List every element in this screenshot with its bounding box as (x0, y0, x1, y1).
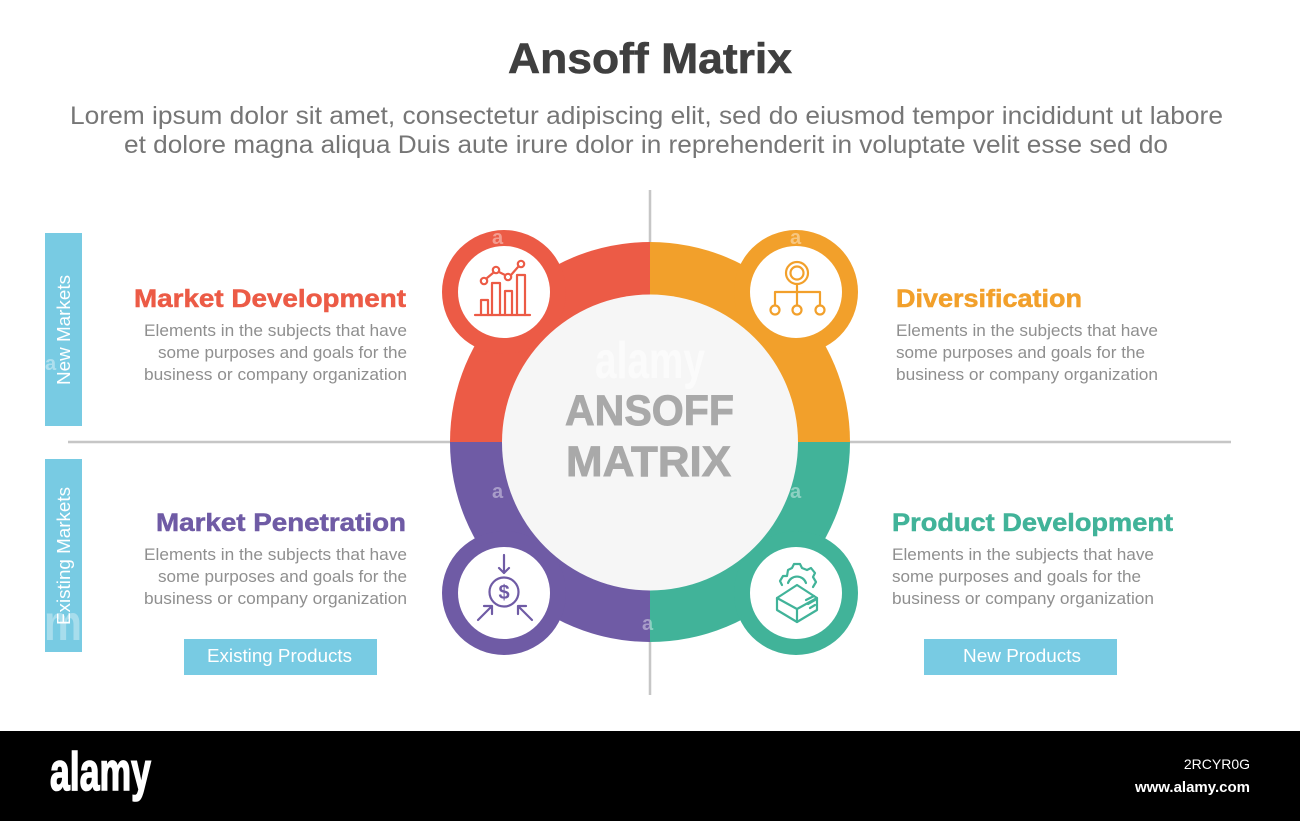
icon: dollar with inward arrows (458, 547, 550, 639)
axis label: Existing Markets (44, 459, 82, 652)
ring segment: green (650, 442, 858, 655)
watermark marks: a (492, 227, 504, 249)
footer band (0, 731, 1300, 821)
axis label: New Markets (45, 233, 82, 426)
text block: Market Penetration: Market Penetration (156, 509, 406, 537)
axis label: Existing Markets: m (44, 595, 82, 651)
axis label: Existing Products: Existing Products (207, 646, 352, 666)
central ring diagram (442, 230, 858, 655)
text block: Market Development: business or company organization (144, 365, 407, 384)
watermark marks: a (492, 481, 504, 503)
axis label: New Products: New Products (963, 646, 1081, 666)
center circle (502, 294, 798, 590)
ring segment: red (442, 230, 650, 442)
center circle: MATRIX (566, 438, 731, 486)
text block: Market Development: Elements in the subjects that have (144, 321, 407, 340)
text block: Product Development: Elements in the subjects that have (892, 545, 1154, 564)
center circle: alamy (595, 332, 705, 390)
icon: box with gear (750, 547, 842, 639)
text block: Diversification (896, 285, 1158, 384)
text block: Diversification: Diversification (896, 285, 1082, 313)
icon: dollar with inward arrows: $ (498, 582, 510, 604)
text block: Diversification: some purposes and goals for the (896, 343, 1145, 362)
watermark marks (45, 227, 802, 635)
center circle: ANSOFF (565, 387, 734, 435)
title: Ansoff Matrix (508, 35, 792, 83)
watermark marks: a (790, 481, 802, 503)
text block: Product Development: business or company organization (892, 589, 1154, 608)
subtitle: Lorem ipsum dolor sit amet, consectetur adipiscing elit, sed do eiusmod tempor incididunt ut labore (70, 102, 1223, 130)
text block: Market Development (134, 285, 407, 384)
text block: Market Penetration: some purposes and goals for the (158, 567, 407, 586)
text block: Market Development: some purposes and goals for the (158, 343, 407, 362)
text block: Market Penetration: Elements in the subjects that have (144, 545, 407, 564)
logo: alamy: alamy (50, 742, 151, 802)
watermark marks: a (642, 613, 654, 635)
watermark marks: a (790, 227, 802, 249)
text block: Market Penetration: business or company organization (144, 589, 407, 608)
text block: Market Development: Market Development (134, 285, 407, 313)
text block: Market Penetration (144, 509, 407, 608)
text block: Diversification: business or company organization (896, 365, 1158, 384)
watermark marks: a (45, 353, 57, 375)
subtitle (70, 102, 1223, 159)
axis label: Existing Markets: Existing Markets (54, 487, 74, 625)
text block: Product Development: some purposes and goals for the (892, 567, 1141, 586)
axis label: New Products (924, 639, 1117, 675)
icon: bar chart with trend line (458, 246, 550, 338)
axis label: Existing Products (184, 639, 377, 675)
image code: 2RCYR0G (1184, 756, 1250, 772)
subtitle: et dolore magna aliqua Duis aute irure dolor in reprehenderit in voluptate velit esse sed do (124, 131, 1168, 159)
icon: hierarchy network (750, 246, 842, 338)
website: www.alamy.com (1134, 779, 1250, 796)
axis label: New Markets: New Markets (54, 275, 74, 385)
ring segment: purple (442, 442, 650, 655)
text block: Product Development: Product Development (892, 509, 1174, 537)
text block: Product Development (892, 509, 1174, 608)
text block: Diversification: Elements in the subjects that have (896, 321, 1158, 340)
ring segment: orange (650, 230, 858, 442)
